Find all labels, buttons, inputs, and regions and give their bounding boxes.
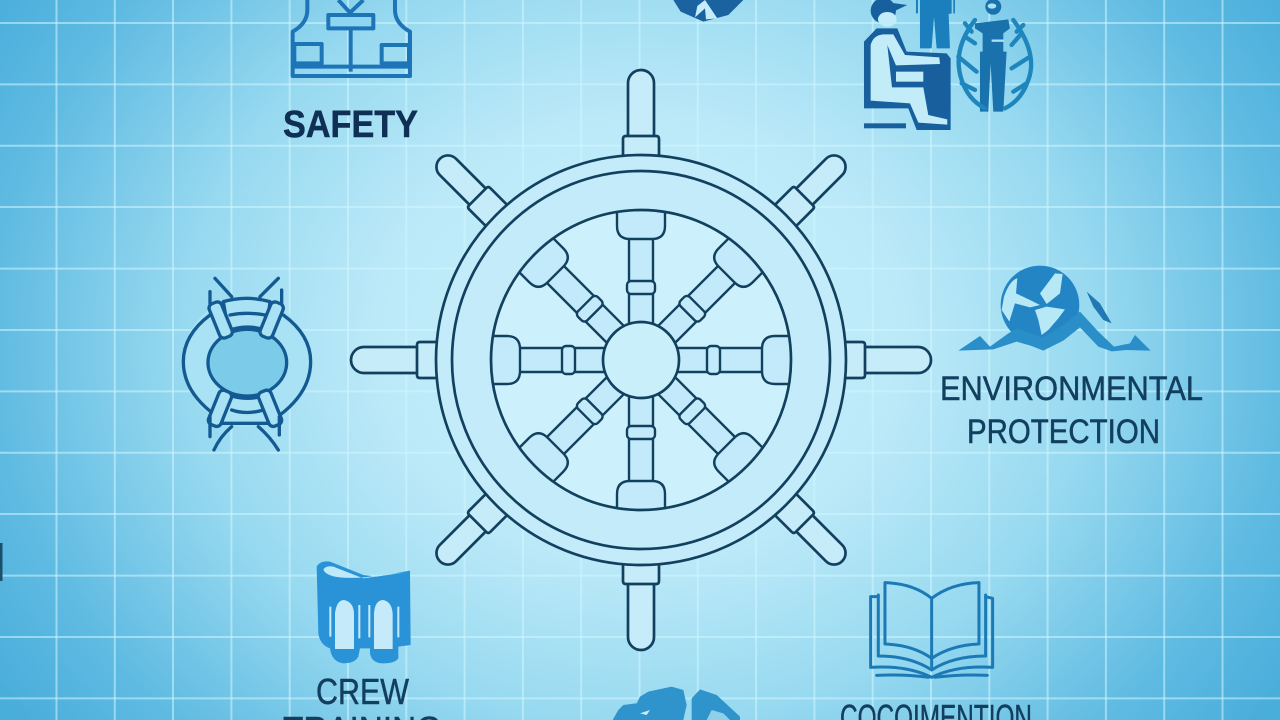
wheel spokes <box>486 205 796 515</box>
wheel inner disc outline <box>491 210 791 510</box>
top band <box>223 298 270 331</box>
heading: environmental protection: PROTECTION <box>967 413 1160 451</box>
icon: crew figures <box>864 0 1031 130</box>
ropes <box>210 278 282 450</box>
wheel handles <box>351 70 931 650</box>
wheel inner disc <box>491 210 791 510</box>
edge fragment <box>0 543 2 581</box>
icon: ship's wheel <box>351 70 931 650</box>
icon: bottom globe fragment <box>613 687 740 720</box>
heading: crew training <box>283 671 442 720</box>
heading: safety: SAFETY <box>283 104 418 146</box>
straps <box>207 301 285 428</box>
bottom band <box>222 395 272 423</box>
heading: environmental protection: ENVIRONMENTAL <box>940 370 1203 408</box>
icon: safety vest <box>293 0 410 76</box>
icon: life ring <box>183 278 311 450</box>
seated figure <box>864 0 951 130</box>
standing figure <box>916 0 955 48</box>
icon: crew training vest <box>317 561 411 663</box>
wheel hub <box>603 322 679 398</box>
icon: globe on mountains <box>958 266 1151 351</box>
icon: open book <box>871 583 993 677</box>
heading: crew training: CREW <box>316 671 409 712</box>
icon: top centre emblem <box>673 0 743 22</box>
wheel rim <box>436 155 846 565</box>
heading: environmental protection <box>940 370 1203 451</box>
figure with wreath <box>958 0 1031 112</box>
